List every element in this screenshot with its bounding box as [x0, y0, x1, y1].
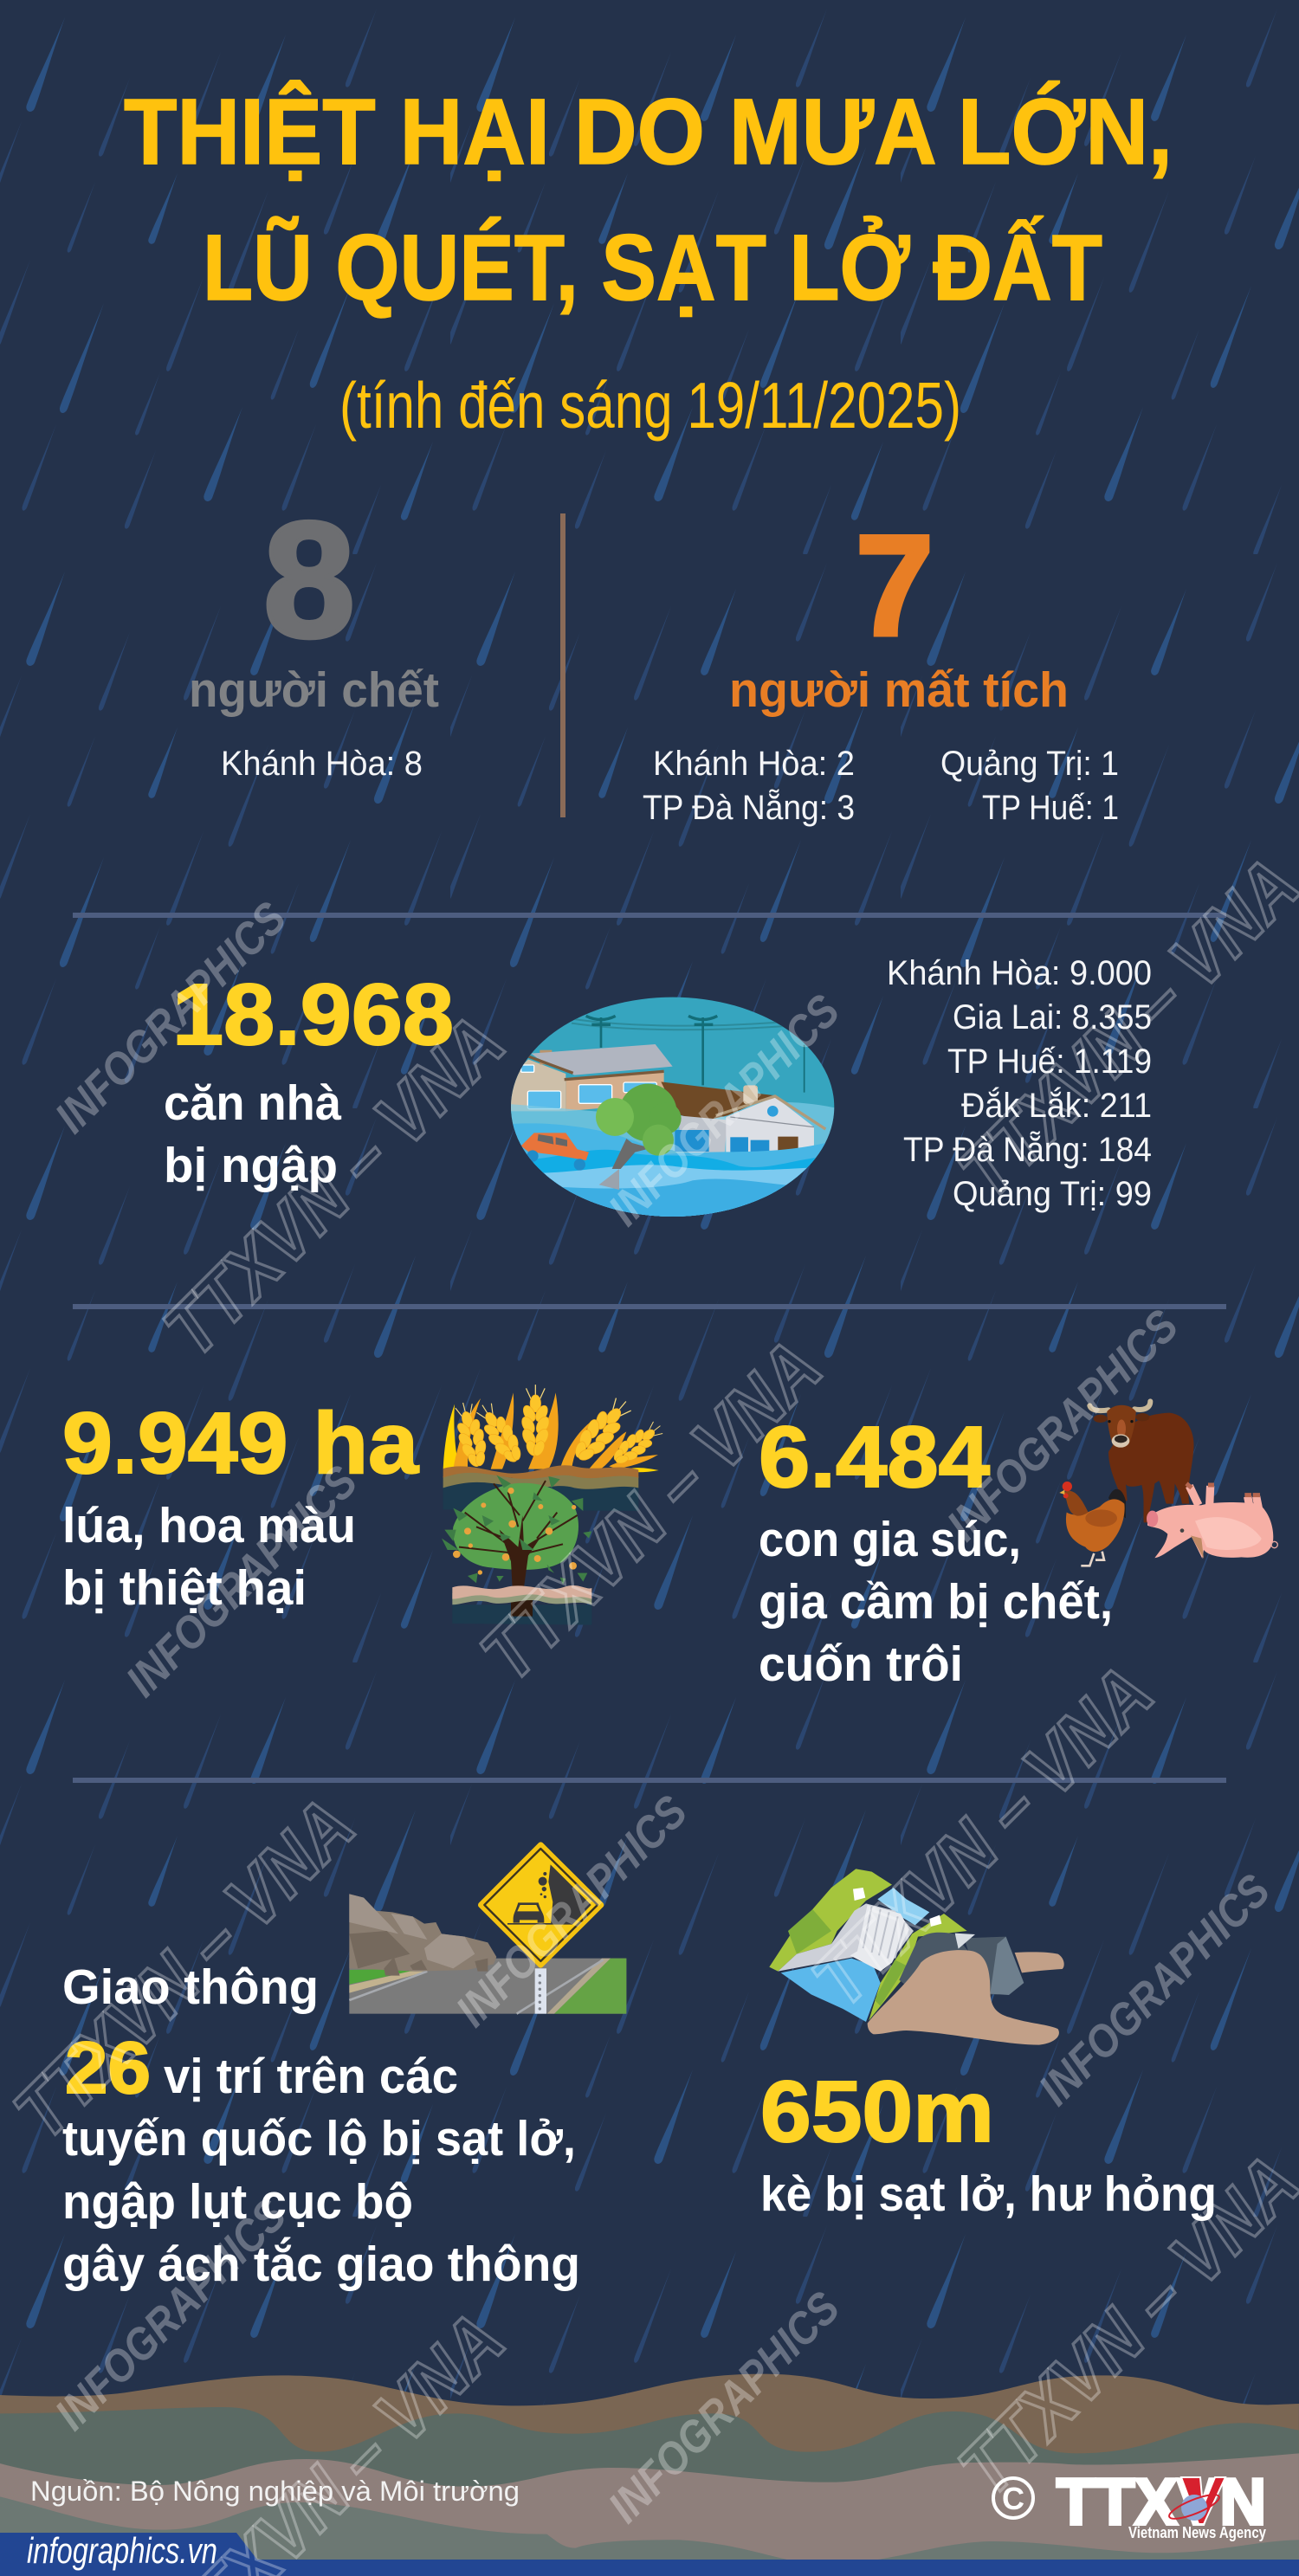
panel: deaths	[189, 488, 439, 783]
label: embankment: kè bị sạt lở, hư hỏng	[760, 2166, 1217, 2222]
heading: transport: Giao thông	[62, 1959, 319, 2015]
label: crops: bị thiệt hại	[62, 1560, 307, 1616]
watermarks: TTXVN – VNA	[0, 1782, 371, 2155]
watermarks: INFOGRAPHICS	[46, 893, 296, 1143]
vertical divider	[560, 513, 565, 817]
title	[124, 79, 1173, 320]
label: transport: tuyến quốc lộ bị sạt lở,	[62, 2111, 576, 2166]
label: houses: bị ngập	[164, 1138, 338, 1193]
watermarks: TTXVN – VNA	[464, 1324, 837, 1697]
label: transport: vị trí trên các	[164, 2049, 458, 2104]
watermarks: INFOGRAPHICS	[599, 985, 850, 1236]
panel: transport	[62, 1845, 626, 2292]
panel: missing	[643, 506, 1119, 827]
subtitle date: (tính đến sáng 19/11/2025)	[339, 369, 961, 442]
label: transport: gây ách tắc giao thông	[62, 2236, 580, 2292]
watermarks: INFOGRAPHICS	[117, 1456, 367, 1707]
copyright mark	[993, 2478, 1033, 2518]
list: houses by province: Đắk Lắk: 211	[961, 1086, 1152, 1125]
label: livestock: con gia súc,	[759, 1512, 1021, 1567]
list: houses by province: Gia Lai: 8.355	[953, 998, 1152, 1036]
number: livestock: 6.484	[759, 1409, 990, 1506]
number: crops: 9.949 ha	[62, 1395, 419, 1492]
watermarks: INFOGRAPHICS	[447, 1786, 697, 2037]
label: transport: ngập lụt cục bộ	[62, 2174, 413, 2230]
tagline: Vietnam News Agency	[1128, 2524, 1266, 2541]
ground layers footer	[0, 2374, 1299, 2560]
number: houses: 18.968	[172, 966, 454, 1063]
panel: livestock	[759, 1401, 1277, 1692]
icon: landslide road sign	[349, 1845, 626, 2014]
list: houses by province: Khánh Hòa: 9.000	[887, 954, 1152, 992]
website: infographics.vn	[27, 2530, 217, 2571]
label: livestock	[759, 1512, 1113, 1692]
breakdown: missing: TP Huế: 1	[982, 789, 1119, 827]
label: houses: căn nhà	[164, 1075, 341, 1131]
list: houses by province: Quảng Trị: 99	[953, 1175, 1152, 1213]
globe	[1167, 2490, 1222, 2523]
watermarks: TTXVN – VNA	[147, 999, 520, 1372]
icon: dam and collapsed embankment	[769, 1869, 1064, 2045]
copyright mark: C	[1002, 2481, 1024, 2516]
icon: flooded neighbourhood	[508, 996, 837, 1218]
watermarks	[0, 842, 1299, 2576]
number: dead: 8	[263, 488, 355, 672]
label: missing: người mất tích	[729, 662, 1069, 718]
red V mark	[1181, 2477, 1225, 2524]
breakdown: missing: Khánh Hòa: 2	[653, 745, 855, 783]
label: dead: người chết	[189, 662, 439, 718]
label: crops: lúa, hoa màu	[62, 1498, 356, 1553]
number: embankment: 650m	[760, 2063, 994, 2160]
wordmark: TTXVN	[1057, 2465, 1266, 2538]
watermarks: TTXVN – VNA	[796, 1650, 1169, 2023]
number: missing: 7	[856, 506, 934, 665]
watermarks: INFOGRAPHICS	[46, 2190, 296, 2440]
title: THIỆT HẠI DO MƯA LỚN,	[124, 79, 1173, 184]
breakdown: dead: Khánh Hòa: 8	[221, 745, 423, 783]
label: crops	[62, 1498, 356, 1616]
number: transport: 26	[65, 2027, 151, 2108]
label: livestock: gia cầm bị chết,	[759, 1574, 1113, 1630]
icon: cow, chicken, pig	[1059, 1401, 1277, 1566]
panel: crops	[62, 1385, 669, 1625]
icon: rice and fruit tree	[442, 1385, 669, 1625]
list: houses by province: TP Đà Nẵng: 184	[903, 1130, 1152, 1169]
breakdown: missing	[643, 745, 1119, 827]
label: transport	[62, 2049, 580, 2292]
list: houses by province	[887, 954, 1152, 1213]
logo: TTXVN	[993, 2465, 1266, 2541]
footer blue band	[0, 2533, 1299, 2576]
panel: embankment	[760, 1869, 1217, 2222]
list: houses by province: TP Huế: 1.119	[947, 1043, 1152, 1081]
source note: Nguồn: Bộ Nông nghiệp và Môi trường	[30, 2476, 520, 2507]
panel: flooded houses	[164, 954, 1152, 1218]
title: LŨ QUÉT, SẠT LỞ ĐẤT	[203, 215, 1102, 320]
watermarks: INFOGRAPHICS	[599, 2282, 850, 2533]
breakdown: missing: TP Đà Nẵng: 3	[643, 788, 855, 827]
label: houses	[164, 1075, 341, 1193]
breakdown: missing: Quảng Trị: 1	[940, 745, 1119, 783]
label: livestock: cuốn trôi	[759, 1637, 963, 1692]
watermarks: INFOGRAPHICS	[938, 1301, 1188, 1551]
